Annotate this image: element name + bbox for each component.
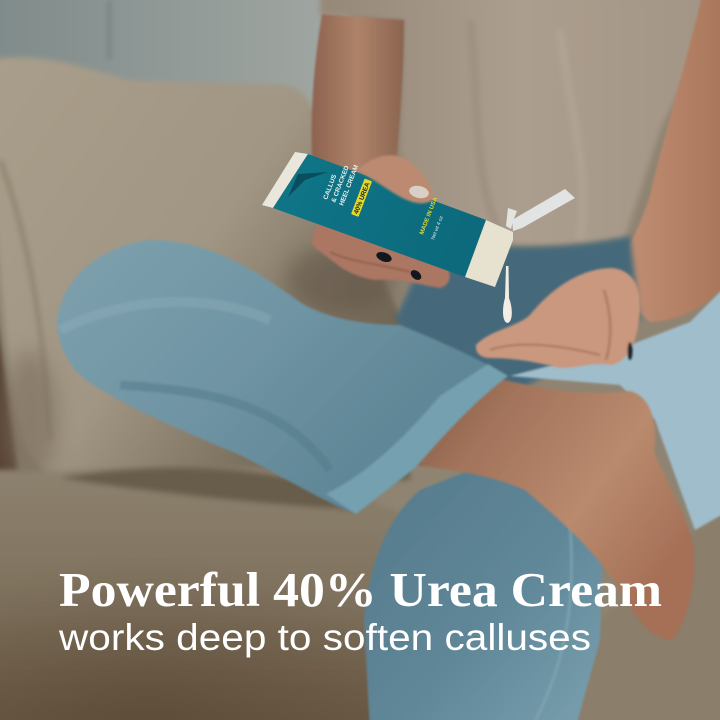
tube cap <box>465 220 513 287</box>
wall background <box>0 0 350 110</box>
left leg jeans <box>57 240 508 514</box>
thumb over tube <box>358 155 433 203</box>
made in usa text: MADE IN USA <box>419 196 439 236</box>
net weight text: Net wt 4 oz <box>430 215 445 241</box>
tube crimp <box>262 152 308 208</box>
product tube <box>262 152 513 287</box>
title: Powerful 40% Urea Cream <box>59 562 662 617</box>
tube body <box>273 154 486 277</box>
black nails <box>375 250 423 282</box>
thumb nail <box>408 184 430 200</box>
subtitle: works deep to soften calluses <box>58 617 591 658</box>
left upper arm <box>312 14 404 185</box>
shirt <box>320 0 720 246</box>
light jeans right thigh <box>510 282 720 530</box>
lower fingers holding tube <box>312 215 450 288</box>
bottom shade on seat <box>0 500 420 720</box>
bare foot <box>368 376 694 640</box>
tube label text: CALLUS <box>322 173 339 201</box>
cream drip <box>503 266 512 323</box>
tube label text: & CRACKED <box>330 165 351 204</box>
sofa back cushion <box>0 57 410 490</box>
right arm <box>610 0 720 322</box>
flip lid <box>506 189 575 231</box>
jeans waist in shadow <box>395 236 640 390</box>
palm leaf logo <box>288 172 328 197</box>
tube label text <box>322 164 360 207</box>
jeans cuff <box>326 364 508 514</box>
sofa seat <box>0 467 720 720</box>
receiving hand <box>476 268 640 368</box>
lower leg jeans <box>364 462 602 720</box>
yellow badge: 40% UREA <box>353 181 372 215</box>
tube label text: HEEL CREAM <box>338 164 360 207</box>
